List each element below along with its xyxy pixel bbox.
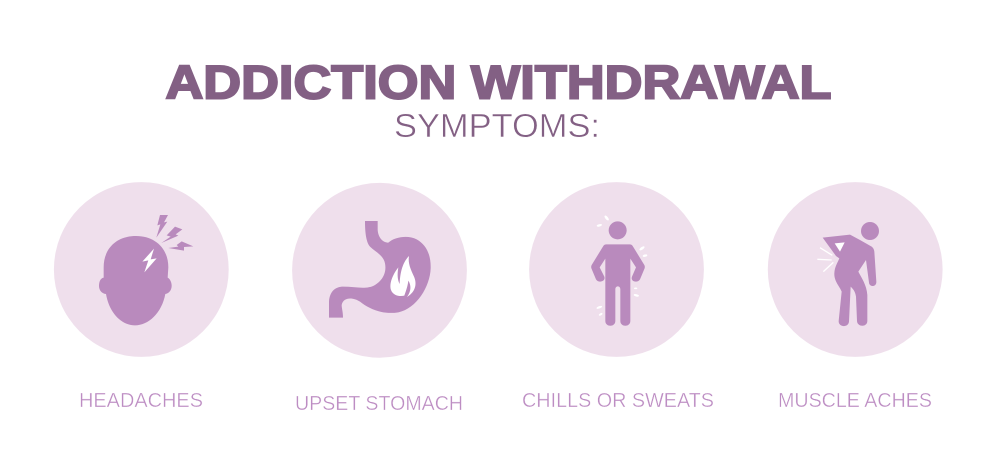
label: headaches: HEADACHES [79,389,203,412]
circle: headaches [54,182,229,357]
panel: upset stomach [292,183,467,415]
subtitle: SYMPTOMS: [394,107,600,144]
label: upset stomach: UPSET STOMACH [295,392,463,415]
panel: chills or sweats [522,182,714,412]
panel: muscle aches [768,182,943,412]
icon: person holding back [817,222,879,326]
label: chills or sweats: CHILLS OR SWEATS [522,389,714,412]
label: muscle aches: MUSCLE ACHES [778,389,932,412]
title: ADDICTION WITHDRAWAL [166,55,832,108]
icon: stomach with flame [329,221,431,318]
circle: upset stomach [292,183,467,358]
circle: chills or sweats [529,182,704,357]
panel: headaches [54,182,229,412]
icon: person with sweat drops [591,215,648,326]
icon: head with lightning [99,215,193,325]
circle: muscle aches [768,182,943,357]
